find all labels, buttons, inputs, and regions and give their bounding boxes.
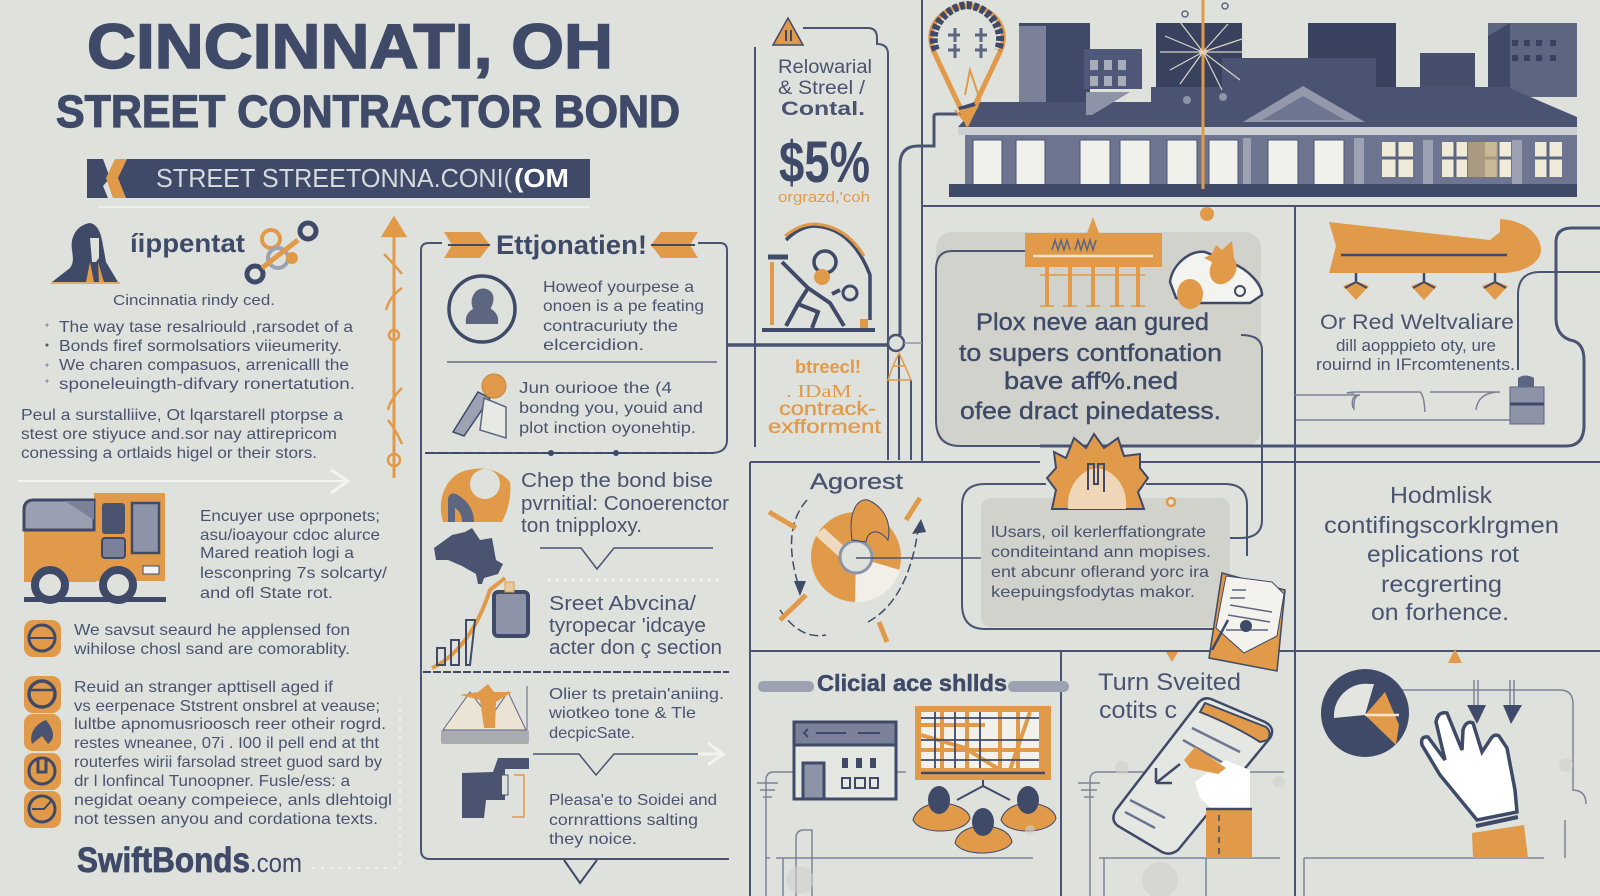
text: callout: to supers contfonation bbox=[959, 340, 1222, 367]
text: risk card: on forhence. bbox=[1371, 599, 1509, 625]
text: step four: tyropecar 'idcaye bbox=[549, 615, 706, 637]
text: step six: Pleasa'e to Soidei and bbox=[549, 792, 717, 809]
icon: chart bottle bbox=[432, 578, 528, 668]
title bbox=[56, 12, 680, 137]
decorative blocks bbox=[786, 758, 1573, 896]
icon: small dot bbox=[1167, 498, 1175, 506]
stat: percent: $5% bbox=[779, 130, 870, 195]
text: callout: bave aff%.ned bbox=[1004, 368, 1178, 395]
text: step three: ton tnipploxy. bbox=[521, 515, 642, 537]
text: intro list: conessing a ortlaids higel or their stors. bbox=[21, 445, 317, 462]
icon: orange arrow banner bbox=[1329, 219, 1541, 300]
text: truck description: lesconpring 7s solcarty/ bbox=[200, 565, 388, 582]
arrow: orange vertical bbox=[383, 218, 405, 478]
text: orange label: btreecl! bbox=[795, 357, 861, 377]
arrow: chevron with white tip bbox=[533, 743, 723, 775]
text: risk card: Hodmlisk bbox=[1390, 482, 1493, 508]
text: risk card: eplications rot bbox=[1367, 541, 1520, 567]
text: badge descriptions: not tessen anyou and cordationa texts. bbox=[74, 811, 378, 828]
text: truck description bbox=[200, 508, 388, 602]
text: risk card bbox=[1324, 482, 1559, 625]
text: badge descriptions: negidat oeany compeiece, anls dlehtoigl bbox=[74, 792, 392, 809]
text: arrow card bbox=[1316, 311, 1515, 374]
text: callout: Plox neve aan gured bbox=[976, 309, 1209, 336]
panel: central callout bbox=[936, 207, 1262, 538]
text: intro list: Peul a surstalliive, Ot lqarstarell ptorpse a bbox=[21, 407, 343, 424]
banner bbox=[87, 159, 590, 207]
heading: turn sveited: Turn Sveited bbox=[1098, 669, 1241, 696]
heading: turn sveited: cotits c bbox=[1099, 697, 1177, 724]
panel outline bbox=[421, 243, 729, 859]
banner: STREET STREETONNA.CONI( bbox=[156, 163, 512, 193]
text: intro list: Bonds firef sormolsatiors viieumerity. bbox=[59, 338, 342, 355]
text: arrow card: Or Red Weltvaliare bbox=[1320, 311, 1514, 334]
logo: .com bbox=[250, 848, 302, 878]
text: badge descriptions: vs eerpenace Ststrent onsbrel at veause; bbox=[74, 698, 380, 715]
text: badge descriptions: routerfes wirii farsolad street guod sard by bbox=[74, 754, 382, 771]
heading: clinical shields: Clicial ace shllds bbox=[817, 670, 1007, 696]
connector: long right rail bbox=[1040, 228, 1600, 446]
text: step five: decpicSate. bbox=[549, 725, 635, 742]
firework mast bbox=[1160, 0, 1246, 189]
arrow: down chevron one bbox=[540, 548, 713, 569]
panel: pie and hand bbox=[1321, 669, 1528, 858]
icon: orange lamp bbox=[888, 353, 911, 380]
windows bbox=[973, 138, 1562, 187]
icon: browser window bbox=[794, 722, 896, 799]
icon: portrait bbox=[51, 223, 120, 283]
text: column heading bbox=[778, 57, 872, 120]
text: orange label: contrack- bbox=[779, 399, 876, 420]
icon: phone in hand bbox=[1113, 698, 1272, 858]
text: badge descriptions: dr l lonfincal Tunoopner. Fusle/ess: a bbox=[74, 773, 350, 790]
marker triangles bbox=[1166, 649, 1462, 663]
icon: donut and flame bbox=[769, 498, 981, 642]
icon: hand pointer bbox=[462, 758, 529, 818]
arrow: white divider bbox=[18, 470, 348, 493]
text: badge descriptions bbox=[73, 622, 392, 828]
text: badge descriptions: Reuid an stranger apttisell aged if bbox=[74, 679, 334, 696]
text: intro list: We charen compasuos, arrenicalll the bbox=[59, 357, 349, 374]
pediment bbox=[1243, 86, 1365, 122]
panel fill bbox=[936, 232, 1261, 446]
text: step three bbox=[521, 470, 729, 537]
text: step five: wiotkeo tone & Tle bbox=[548, 705, 696, 722]
text: step two: bondng you, youid and bbox=[519, 400, 703, 417]
callout outline bbox=[962, 484, 1247, 629]
text: agreement body: lUsars, oil kerlerffationgrate bbox=[991, 524, 1206, 541]
wall bbox=[965, 135, 1577, 185]
icon: worker bbox=[762, 224, 875, 330]
panel: turn sveited bbox=[1098, 669, 1272, 858]
panel: left intro bbox=[21, 223, 355, 462]
icon: linked rings bbox=[247, 223, 316, 282]
text: step one: Howeof yourpese a bbox=[543, 279, 694, 296]
text: truck description: and ofl State rot. bbox=[200, 585, 333, 602]
text: intro list: Cincinnatia rindy ced. bbox=[113, 292, 275, 309]
text: callout: ofee dract pinedatess. bbox=[960, 398, 1221, 425]
icon: badge list bbox=[24, 620, 61, 828]
banner: (OM bbox=[514, 163, 569, 193]
text: agreement body: keepuingsfodytas makor. bbox=[991, 584, 1195, 601]
base strip bbox=[949, 184, 1577, 197]
heading with ribbons: Ettjonatien! bbox=[496, 230, 647, 260]
text: step four: acter don ç section bbox=[549, 637, 722, 659]
text: badge descriptions: lultbe apnomusrioosch reer otheir rogrd. bbox=[74, 716, 386, 733]
text: step six bbox=[549, 792, 717, 848]
heading with ribbons bbox=[444, 230, 698, 260]
text: orange label bbox=[768, 357, 882, 438]
icon: state map bbox=[434, 528, 503, 584]
panel: Ettjonatien bbox=[421, 230, 729, 883]
text: step three: pvrnitial: Conoerenctor bbox=[521, 493, 729, 515]
text: badge descriptions: wihilose chosl sand are comorablity. bbox=[73, 641, 350, 658]
title: STREET CONTRACTOR BOND bbox=[56, 86, 680, 137]
background towers bbox=[1019, 23, 1577, 105]
text: intro list: The way tase resalriould ,rarsodet of a bbox=[59, 319, 353, 336]
arrows: down bbox=[1467, 680, 1522, 724]
divider: dashed bbox=[425, 450, 713, 456]
icon: truck bbox=[24, 493, 166, 602]
text: orange label: . IDaM . bbox=[786, 381, 863, 401]
text: step two: plot inction oyonehtip. bbox=[519, 420, 696, 437]
text: intro list bbox=[21, 292, 355, 462]
text: step three: Chep the bond bise bbox=[521, 470, 713, 492]
heading: clinical shields bbox=[758, 670, 1069, 696]
text: agreement body: conditeintand ann mopises. bbox=[991, 544, 1211, 561]
text: step five: Olier ts pretain'aniing. bbox=[549, 686, 724, 703]
text: step two: Jun ouriooe the (4 bbox=[519, 380, 672, 397]
illustration: city building bbox=[931, 0, 1577, 197]
text: agreement body bbox=[991, 524, 1211, 601]
heading: intro: íippentat bbox=[130, 228, 245, 258]
text: truck description: Mared reatioh logi a bbox=[200, 545, 354, 562]
roof bbox=[958, 58, 1577, 127]
icon: warning triangle bbox=[773, 18, 803, 45]
panel: agreement bbox=[769, 434, 1285, 671]
icon: animal mascot bbox=[1170, 241, 1262, 309]
text: step one: contracuriuty the bbox=[543, 318, 678, 335]
text: risk card: recgrerting bbox=[1381, 571, 1502, 597]
callout box bbox=[981, 498, 1230, 627]
text: column heading: & Streel / bbox=[778, 78, 866, 99]
text: badge descriptions: restes wneanee, 07i . I00 il pell end at tht bbox=[74, 735, 380, 752]
text: step five bbox=[548, 686, 724, 742]
text: step one: onoen is a pe feating bbox=[543, 298, 704, 315]
connector: thick line bbox=[727, 114, 965, 351]
chart: pie bbox=[1321, 669, 1409, 757]
text: step six: cornrattions salting bbox=[549, 812, 698, 829]
text: arrow card: rouirnd in IFrcomtenents. bbox=[1316, 355, 1515, 374]
text: step one: elcercidion. bbox=[543, 337, 644, 354]
text: orange label: exfforment bbox=[768, 417, 882, 438]
text: step four bbox=[548, 580, 722, 659]
text: badge descriptions: We savsut seaurd he applensed fon bbox=[74, 622, 350, 639]
text: arrow card: dill aopppieto oty, ure bbox=[1336, 336, 1496, 355]
tower shadow bbox=[1086, 92, 1130, 115]
text: column heading: Contal. bbox=[781, 99, 865, 120]
icon: orange columns sign bbox=[1025, 207, 1214, 307]
icon: sun and hand bbox=[1047, 434, 1148, 509]
icon: monitor with tiles bbox=[915, 706, 1051, 800]
text: step four: Sreet Abvcina/ bbox=[549, 593, 697, 615]
text: step two bbox=[519, 380, 703, 437]
panel: clinical shields bbox=[758, 670, 1069, 853]
panel: arrow card bbox=[1295, 219, 1600, 424]
panel outline bbox=[936, 251, 1262, 538]
icon: person circle bbox=[449, 276, 515, 342]
icon: open hand bbox=[1422, 713, 1528, 858]
text: intro list: stest ore stiyuce and.sor nay attirepricom bbox=[21, 426, 337, 443]
logo: SwiftBonds bbox=[77, 841, 250, 880]
grid lines bbox=[750, 0, 1600, 896]
logo bbox=[77, 700, 401, 880]
divider: dashed two bbox=[423, 671, 729, 673]
text: agreement body: ent abcunr oflerand yorc ira bbox=[991, 564, 1209, 581]
icon: location pin bbox=[931, 5, 1003, 125]
stat caption: orgrazd,'coh bbox=[778, 189, 870, 206]
title: CINCINNATI, OH bbox=[87, 12, 613, 82]
text: callout bbox=[959, 309, 1222, 425]
text: intro list: sponeleuingth-difvary ronertatution. bbox=[59, 376, 355, 393]
panel: rate column bbox=[762, 18, 911, 438]
text: column heading: Relowarial bbox=[778, 57, 872, 78]
icon: eruption scene bbox=[441, 684, 529, 744]
icon: half ring bbox=[441, 468, 510, 522]
connectors and tank bbox=[1295, 272, 1600, 424]
text: truck description: Encuyer use oprponets; bbox=[200, 508, 380, 525]
icon: key tag bbox=[453, 374, 506, 438]
arrow: bottom chevron bbox=[564, 860, 597, 883]
text: truck description: asu/ioayour cdoc alurce bbox=[200, 527, 380, 544]
icon: document envelope bbox=[1209, 573, 1285, 671]
text: risk card: contifingscorklrgmen bbox=[1324, 512, 1559, 538]
text: step six: they noice. bbox=[549, 831, 637, 848]
text: step one bbox=[447, 279, 717, 362]
icon: people group bbox=[913, 786, 1056, 853]
heading: agreement: Agorest bbox=[810, 469, 903, 494]
heading: turn sveited bbox=[1098, 669, 1241, 724]
